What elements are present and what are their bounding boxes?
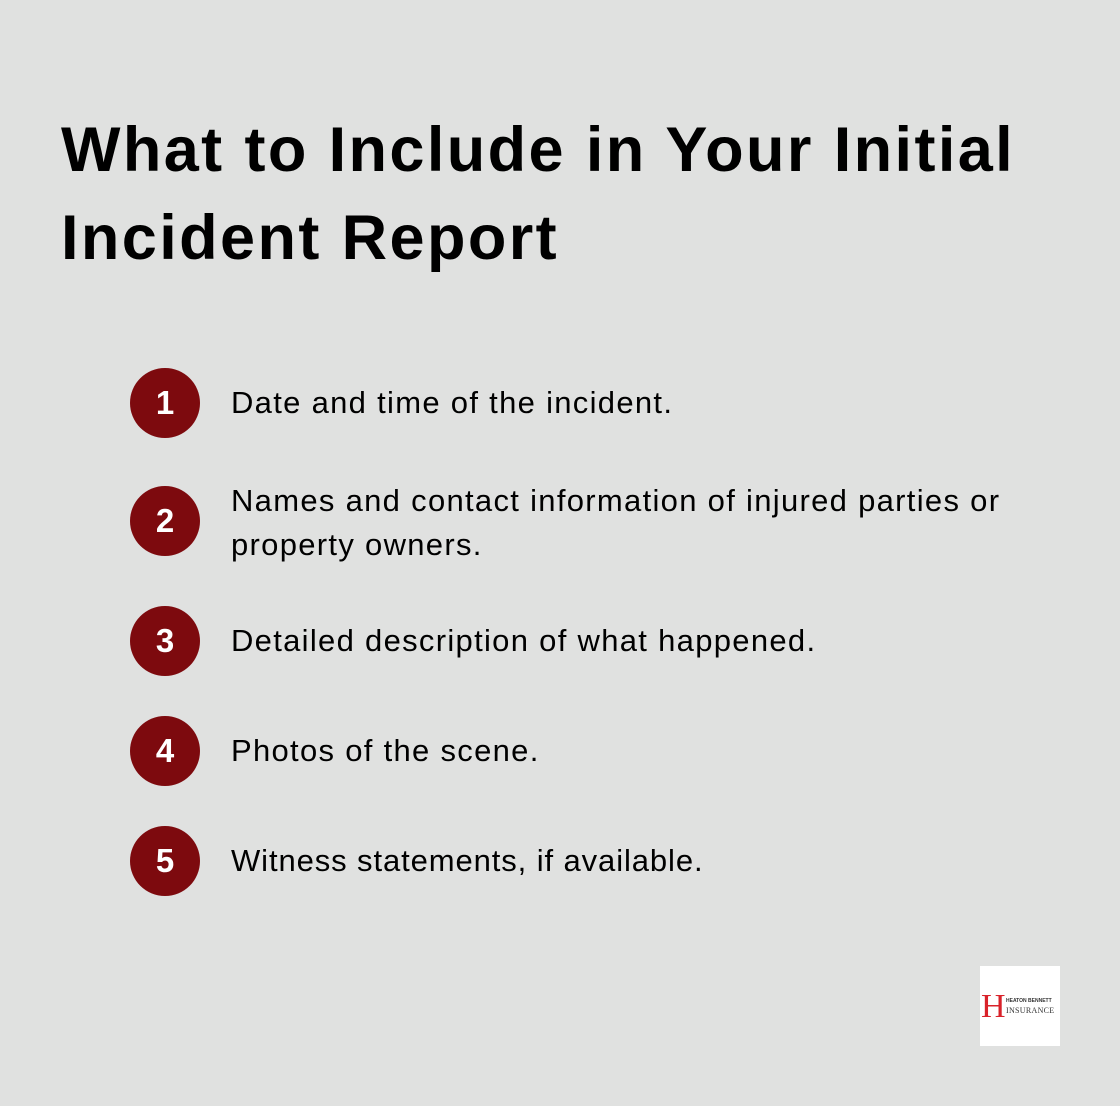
item 3: 3 xyxy=(156,622,174,659)
item 2: Names and contact information of injured parties or xyxy=(231,483,1000,518)
title: What to Include in Your Initial xyxy=(61,115,1015,185)
item 1 xyxy=(130,368,673,438)
logo: HEATON BENNETT xyxy=(1006,998,1052,1004)
title: Incident Report xyxy=(61,203,559,273)
item 3: Detailed description of what happened. xyxy=(231,623,816,658)
item 2 xyxy=(130,483,1000,562)
item 1: Date and time of the incident. xyxy=(231,385,673,420)
item 5: Witness statements, if available. xyxy=(231,843,704,878)
item 1: 1 xyxy=(156,384,174,421)
item 3 xyxy=(130,606,816,676)
item 4 xyxy=(130,716,540,786)
logo xyxy=(980,966,1060,1046)
item 2: property owners. xyxy=(231,527,483,562)
item 4: Photos of the scene. xyxy=(231,733,540,768)
logo: INSURANCE xyxy=(1006,1006,1054,1015)
item 5 xyxy=(130,826,704,896)
title xyxy=(61,115,1015,273)
item 4: 4 xyxy=(156,732,174,769)
item 5: 5 xyxy=(156,842,174,879)
logo: H xyxy=(981,988,1006,1025)
item 2: 2 xyxy=(156,502,174,539)
